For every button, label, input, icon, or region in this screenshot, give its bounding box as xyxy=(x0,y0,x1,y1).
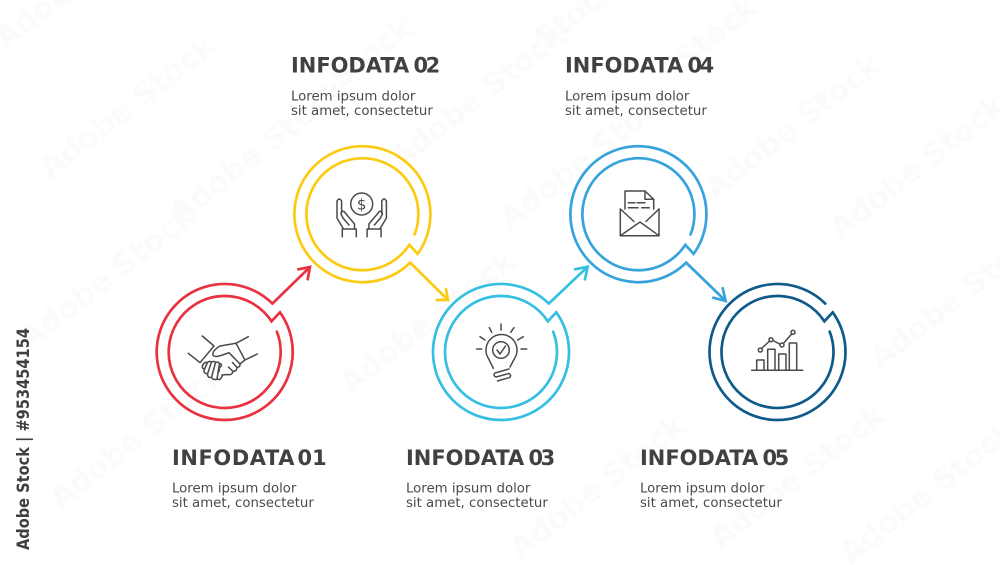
text: Adobe Stock xyxy=(43,358,233,516)
text: infodata 02 description: Lorem ipsum dolor xyxy=(291,90,415,104)
heading: infodata 04: 04 xyxy=(688,54,714,78)
step 5: navy ring xyxy=(710,284,846,420)
text: Adobe Stock xyxy=(503,408,693,565)
text: Adobe Stock xyxy=(703,398,893,556)
text: infodata 04 description: Lorem ipsum dolor xyxy=(565,90,689,104)
text: infodata 05 description: sit amet, consectetur xyxy=(640,496,782,511)
text: infodata 03 description: sit amet, consectetur xyxy=(406,496,548,511)
text: Adobe Stock xyxy=(383,18,573,176)
text: infodata 05 description: Lorem ipsum dolor xyxy=(640,482,764,496)
heading: infodata 01: INFODATA xyxy=(172,446,295,470)
heading: infodata 01: 01 xyxy=(298,446,327,470)
text: Adobe Stock xyxy=(13,198,203,356)
step 3: cyan ring with arrow xyxy=(433,267,588,420)
text: Adobe Stock xyxy=(333,243,523,401)
side credit text: Adobe Stock | #953454154 xyxy=(14,328,34,550)
text: Adobe Stock xyxy=(33,28,223,186)
text: Stock xyxy=(323,10,420,96)
step 4: blue ring with arrow xyxy=(570,146,726,301)
heading: infodata 03: 03 xyxy=(528,446,554,470)
icon: hands holding coin: $ xyxy=(357,196,366,214)
icon: hands holding coin xyxy=(337,193,386,237)
icon: handshake xyxy=(188,336,257,380)
text: Adobe Stock xyxy=(698,48,888,206)
heading: infodata 05: INFODATA xyxy=(640,446,758,470)
step 1: red ring with arrow xyxy=(157,267,310,420)
text: infodata 04 description: sit amet, consectetur xyxy=(565,104,707,119)
text: infodata 01 description: Lorem ipsum dolor xyxy=(172,482,296,496)
text: infodata 03 description: Lorem ipsum dolor xyxy=(406,482,530,496)
text: infodata 02 description: sit amet, consectetur xyxy=(291,104,433,119)
heading: infodata 05: 05 xyxy=(762,446,789,470)
icon: envelope with letter xyxy=(620,191,659,236)
text: infodata 01 description: sit amet, consectetur xyxy=(172,496,314,511)
heading: infodata 04: INFODATA xyxy=(565,54,683,78)
heading: infodata 02: 02 xyxy=(414,54,439,78)
icon: light bulb with check xyxy=(477,324,527,381)
heading: infodata 03: INFODATA xyxy=(406,446,524,470)
text: Adobe Stock xyxy=(163,73,353,231)
text: Adobe Stock xyxy=(493,78,683,236)
heading: infodata 02: INFODATA xyxy=(291,54,409,78)
step 2: yellow ring with arrow xyxy=(294,146,448,300)
icon: bar and line chart xyxy=(752,330,803,370)
